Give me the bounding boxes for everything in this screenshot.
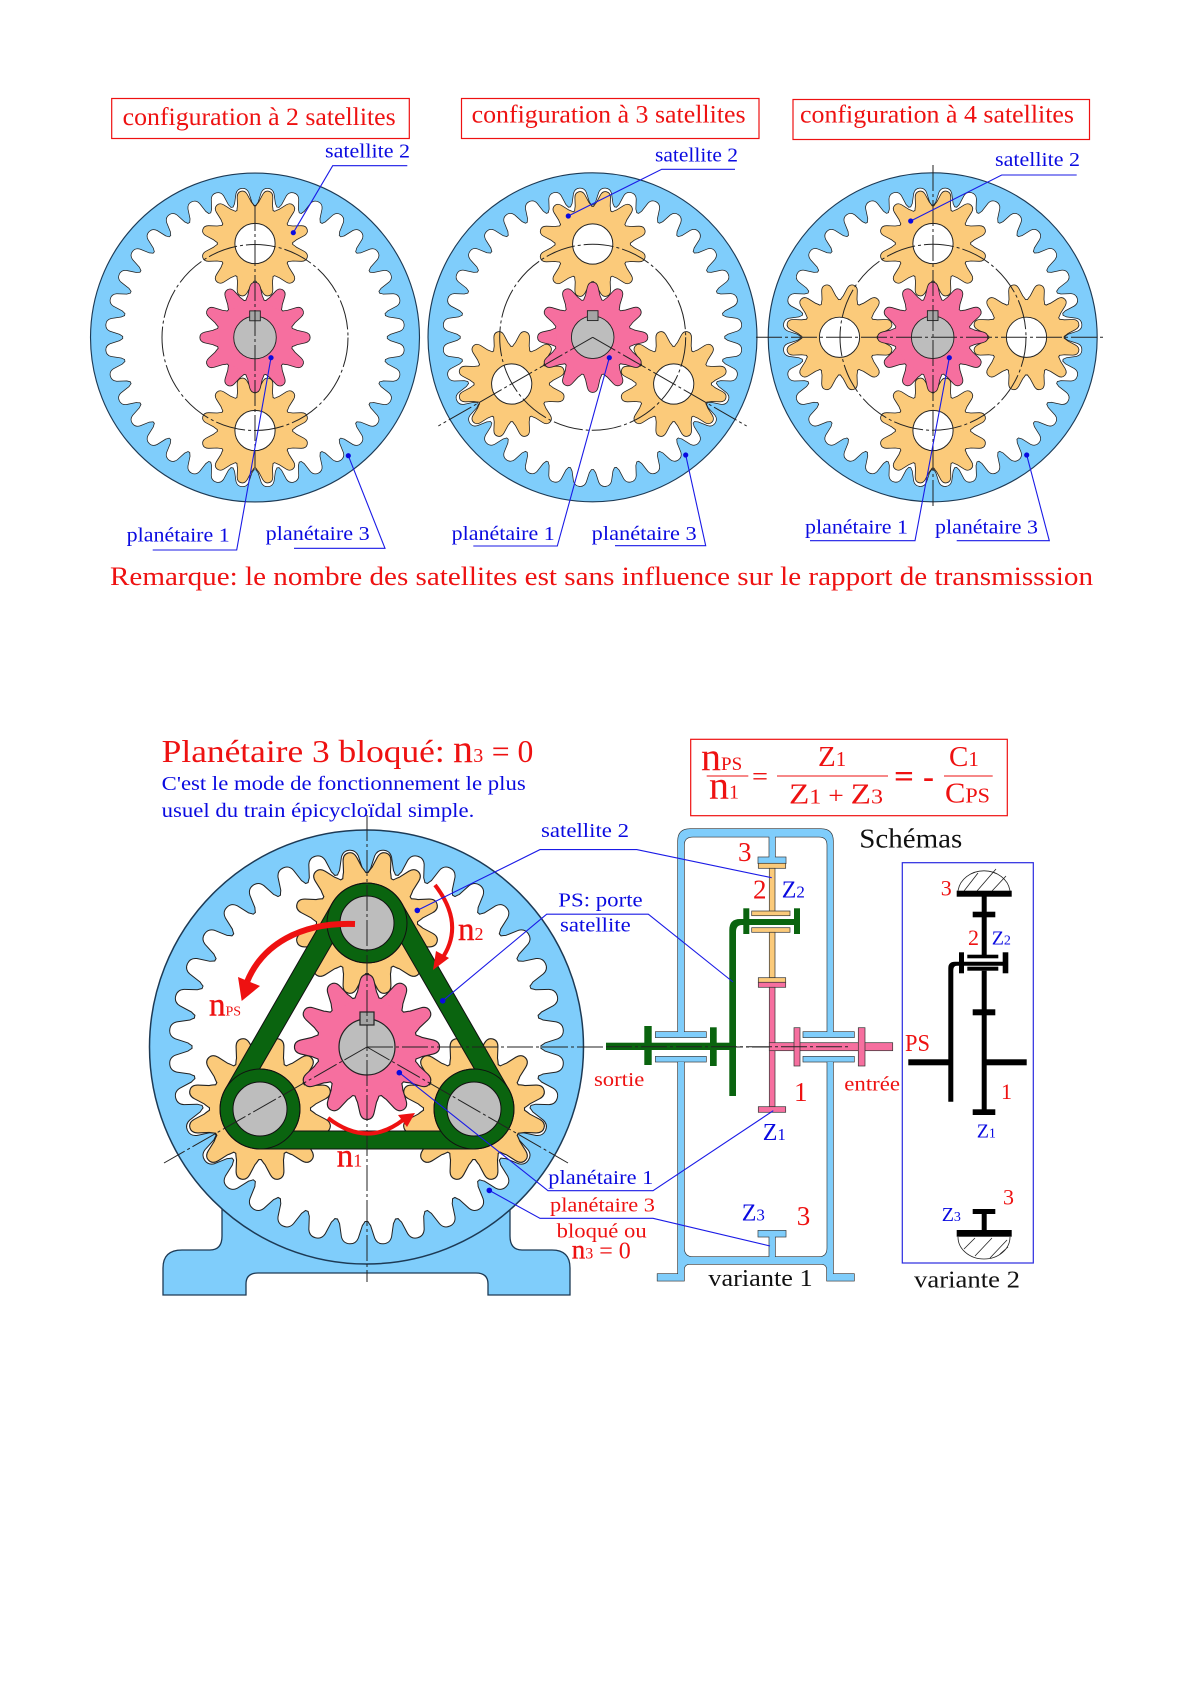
heading: configuration 3 (462, 98, 759, 138)
panel: configuration à 2 satellites (89, 98, 421, 550)
frame (902, 863, 1033, 1263)
label n2: n2 (458, 912, 484, 948)
arrow n1 (328, 1113, 415, 1134)
variante 1 label: variante 1 (708, 1266, 813, 1292)
labels and leaders (805, 149, 1080, 541)
labels and leaders: planétaire 1 (452, 523, 555, 545)
gear train with 3 satellites (426, 171, 759, 504)
leader: planétaire 3 bloqué: bloqué ou (557, 1221, 647, 1243)
satellite pins (220, 883, 514, 1149)
formula (691, 734, 1007, 816)
satellite section (752, 863, 790, 982)
leader: PS porte satellite (440, 890, 733, 1004)
sun gear (295, 975, 439, 1119)
labels (905, 876, 1014, 1226)
variante 2 label: variante 2 (914, 1267, 1020, 1293)
formula: nPS (701, 734, 742, 779)
labels and leaders: planétaire 3 (266, 523, 370, 545)
formula: - (923, 758, 934, 794)
leader: planétaire 3 bloqué: n3 = 0 (572, 1234, 631, 1264)
arrow n2 (433, 885, 452, 970)
label nPS: nPS (209, 987, 241, 1023)
leader: PS porte satellite: satellite (560, 914, 631, 936)
labels and leaders: planétaire 3 (592, 523, 697, 545)
rotation arrows (209, 885, 484, 1175)
formula: C1 (949, 741, 979, 773)
satellites (172, 835, 562, 1197)
label n1: n1 (337, 1139, 362, 1175)
centre line (606, 1046, 850, 1048)
labels: 3 (941, 876, 952, 901)
heading: configuration 4: configuration à 4 satellites (800, 102, 1074, 128)
gear train with 2 satellites (89, 171, 421, 504)
intro text (162, 773, 526, 822)
numbers and tooth labels: Z1 (763, 1120, 786, 1146)
formula: n1 (709, 762, 739, 808)
heading: planétaire 3 bloqué: n (453, 726, 473, 771)
top fixed hatch (958, 869, 1010, 891)
labels: Z3 (942, 1204, 961, 1226)
heading: planétaire 3 bloqué (162, 726, 533, 771)
numbers and tooth labels: 3 (797, 1201, 810, 1231)
gear train with 4 satellites (756, 165, 1105, 508)
heading: planétaire 3 bloqué: = 0 (492, 733, 533, 769)
leader: planétaire 1 (396, 1070, 773, 1191)
leader: PS porte satellite: PS: porte (558, 890, 643, 912)
labels and leaders: planétaire 1 (127, 525, 230, 547)
sun section (758, 982, 893, 1112)
housing (656, 829, 854, 1281)
schematic variante 1 (594, 829, 900, 1292)
labels and leaders (452, 145, 738, 546)
numbers and tooth labels: 3 (738, 837, 752, 867)
formula: = (894, 758, 914, 794)
labels and leaders: satellite 2 (655, 145, 738, 167)
labels: 3 (1003, 1184, 1014, 1209)
labels and leaders (127, 141, 410, 550)
Schémas heading: Schémas (859, 823, 962, 853)
axes (164, 815, 850, 1282)
labels: Z2 (992, 927, 1011, 949)
schematic variante 2 (902, 863, 1033, 1293)
numbers and tooth labels: Z2 (782, 878, 805, 904)
labels and leaders: satellite 2 (325, 141, 410, 163)
planet carrier (220, 883, 514, 1149)
numbers and tooth labels: 2 (753, 874, 766, 904)
heading: configuration 3: configuration à 3 satellites (472, 102, 746, 128)
panel: configuration à 4 satellites (756, 100, 1105, 541)
leader: satellite 2: satellite 2 (541, 820, 629, 842)
heading: configuration 2 (112, 98, 409, 138)
bottom fixed hatch (958, 1237, 1010, 1259)
labels and leaders: planétaire 3 (935, 516, 1038, 538)
leader: satellite 2 (414, 820, 772, 913)
leader: planétaire 3 bloqué (486, 1188, 770, 1264)
labels: 2 (968, 925, 979, 950)
kinematic lines (908, 891, 1027, 1237)
intro text: usuel du train épicycloïdal simple. (162, 800, 474, 822)
ring gear (147, 827, 586, 1267)
heading: planétaire 3 bloqué: Planétaire 3 bloqué: (162, 733, 445, 769)
panel: configuration à 3 satellites (426, 98, 759, 546)
entrée label: entrée (844, 1074, 900, 1096)
heading: planétaire 3 bloqué: 3 (473, 745, 483, 767)
numbers and tooth labels: Z3 (742, 1201, 765, 1227)
numbers and tooth labels: 1 (794, 1077, 808, 1107)
labels: Z1 (977, 1120, 996, 1142)
labels: PS (905, 1031, 930, 1057)
arrow nPS (238, 924, 355, 1001)
leader: planétaire 3 bloqué: planétaire 3 (550, 1195, 655, 1217)
intro text: C'est le mode de fonctionnement le plus (162, 773, 526, 795)
labels: 1 (1001, 1079, 1012, 1104)
leader: planétaire 1: planétaire 1 (548, 1167, 653, 1189)
base of ring gear (163, 1190, 570, 1295)
numbers and tooth labels (738, 837, 810, 1231)
formula: CPS (945, 778, 990, 810)
sortie label: sortie (594, 1069, 644, 1091)
carrier section (606, 908, 800, 1096)
heading: configuration 2: configuration à 2 satellites (123, 104, 396, 131)
main gear train with planet carrier (147, 815, 850, 1295)
heading: configuration 4 (793, 100, 1090, 140)
formula: = (752, 762, 768, 791)
remark: Remarque: le nombre des satellites est sans influence sur le rapport de transmisssion (110, 562, 1093, 591)
formula: Z1 (818, 741, 846, 773)
formula: Z1 + Z3 (789, 778, 883, 810)
labels and leaders: satellite 2 (995, 149, 1080, 171)
labels and leaders: planétaire 1 (805, 516, 908, 538)
